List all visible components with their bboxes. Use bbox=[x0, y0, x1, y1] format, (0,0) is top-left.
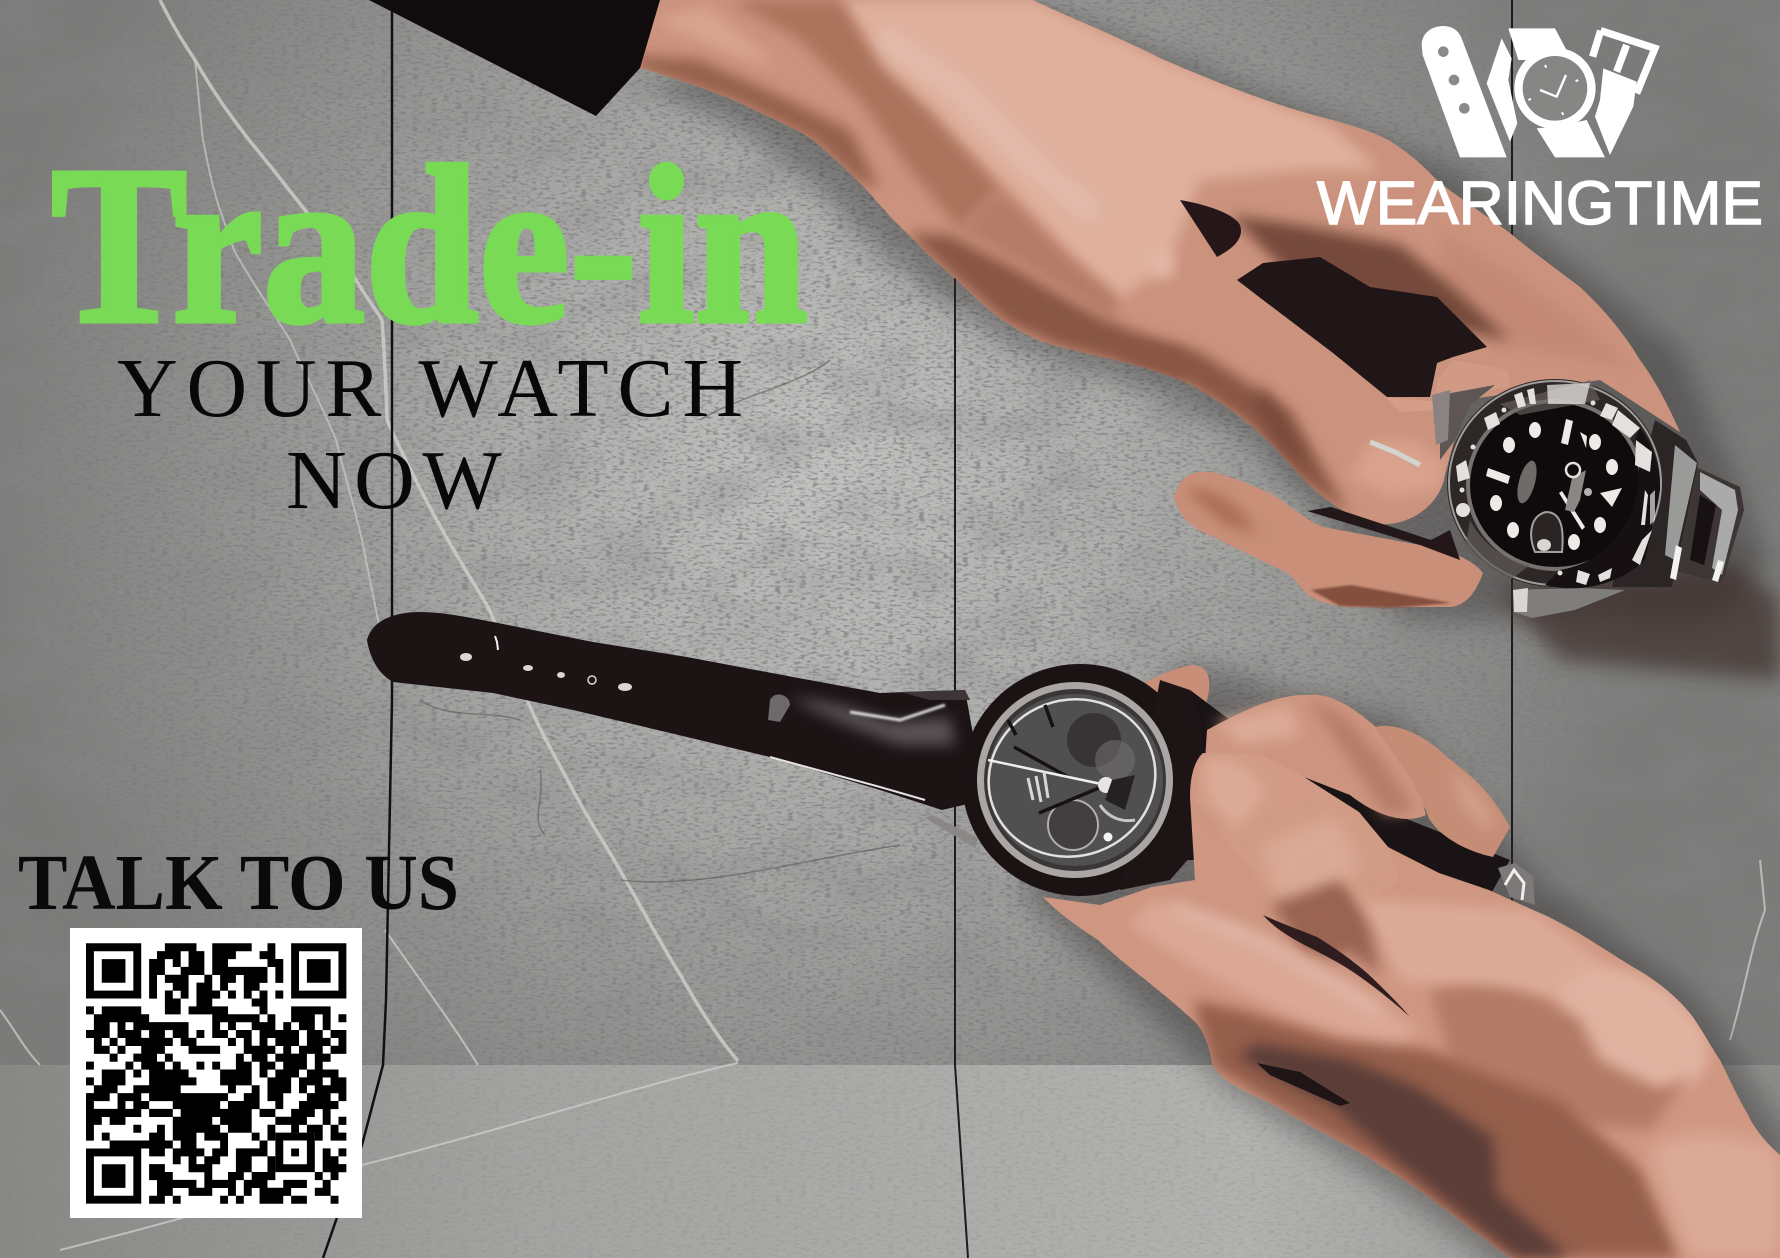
call to action: TALK TO US: TALK TO US bbox=[18, 840, 459, 927]
heading: Trade-in: Trade-in bbox=[51, 120, 808, 370]
strap behind fingers bbox=[1150, 690, 1510, 897]
icon: watch strap bbox=[1422, 26, 1507, 157]
bracelet bbox=[1500, 560, 1780, 680]
strap bbox=[367, 612, 985, 810]
thumb tip behind watch bbox=[1144, 665, 1209, 723]
case bbox=[1447, 379, 1663, 587]
bottom hand front bbox=[1030, 680, 1780, 1258]
bottom watch bbox=[367, 612, 1205, 906]
rear finger bbox=[1376, 726, 1510, 857]
bottom hand and strap bbox=[1020, 660, 1780, 1258]
hand and wrist bbox=[1043, 753, 1780, 1258]
pusher bbox=[925, 815, 978, 848]
icon: watch face bbox=[1514, 48, 1596, 129]
index finger bbox=[1174, 472, 1483, 607]
middle finger bbox=[1205, 695, 1426, 819]
bezel marks bbox=[1456, 383, 1655, 585]
hand base bbox=[620, 0, 1700, 540]
subheading: NOW: NOW bbox=[286, 434, 509, 527]
sleeve bbox=[369, 0, 660, 116]
QR code bbox=[70, 928, 362, 1218]
buckle bbox=[1498, 863, 1535, 905]
finger back bbox=[1450, 248, 1602, 354]
subheading: YOUR WATCH: YOUR WATCH bbox=[117, 342, 752, 435]
top hand with sleeve bbox=[369, 0, 1770, 620]
logo: WearingTime bbox=[1317, 26, 1763, 237]
icon: buckle bbox=[1593, 31, 1655, 93]
case bbox=[962, 664, 1198, 896]
top watch bbox=[1432, 379, 1780, 680]
wordmark: WEARINGTIME bbox=[1317, 169, 1763, 237]
